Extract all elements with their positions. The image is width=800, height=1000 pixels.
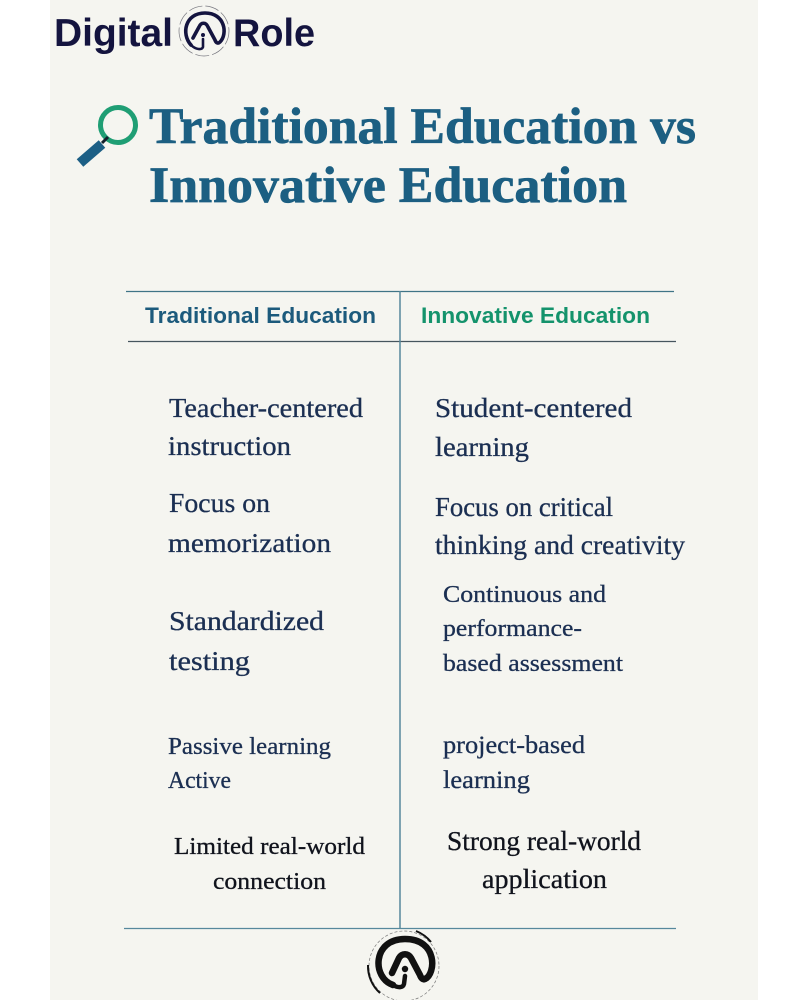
logo: Digital Role: Role — [233, 12, 315, 55]
column: traditional items — [168, 393, 365, 895]
icon: bottom logo mark — [368, 931, 439, 1000]
column: traditional items: Teacher-centered — [169, 393, 364, 423]
title: Innovative Education — [149, 158, 627, 214]
table rules — [124, 291, 676, 929]
column: innovative items: Student-centered — [435, 393, 633, 423]
column: innovative items: learning — [443, 767, 531, 794]
column heading: Traditional Education: Traditional Education — [145, 303, 376, 328]
icon: magnifying glass — [80, 108, 136, 163]
column: traditional items: testing — [169, 646, 250, 676]
title: Traditional Education vs — [149, 99, 696, 155]
column: innovative items: application — [482, 864, 608, 894]
column: traditional items: Active — [168, 768, 231, 794]
column: innovative items: Focus on critical — [435, 492, 613, 522]
logo: Digital Role: Digital — [54, 12, 173, 55]
column: innovative items: based assessment — [443, 651, 623, 677]
column: traditional items: Passive learning — [168, 734, 331, 760]
column: innovative items: performance- — [443, 616, 582, 642]
column: innovative items: project-based — [443, 732, 586, 759]
column: innovative items: thinking and creativity — [435, 530, 686, 560]
column: traditional items: Standardized — [169, 606, 325, 636]
column: traditional items: instruction — [168, 431, 292, 461]
column heading: Innovative Education: Innovative Education — [421, 303, 650, 328]
title — [149, 99, 696, 214]
column: traditional items: Limited real-world — [174, 834, 365, 860]
logo: Digital Role — [54, 6, 315, 56]
column: innovative items: learning — [435, 432, 529, 462]
column: innovative items: Continuous and — [443, 582, 606, 608]
column: innovative items — [435, 393, 686, 894]
column: traditional items: connection — [213, 869, 326, 895]
column: innovative items: Strong real-world — [447, 826, 642, 856]
column: traditional items: memorization — [168, 528, 332, 558]
column: traditional items: Focus on — [169, 488, 271, 518]
